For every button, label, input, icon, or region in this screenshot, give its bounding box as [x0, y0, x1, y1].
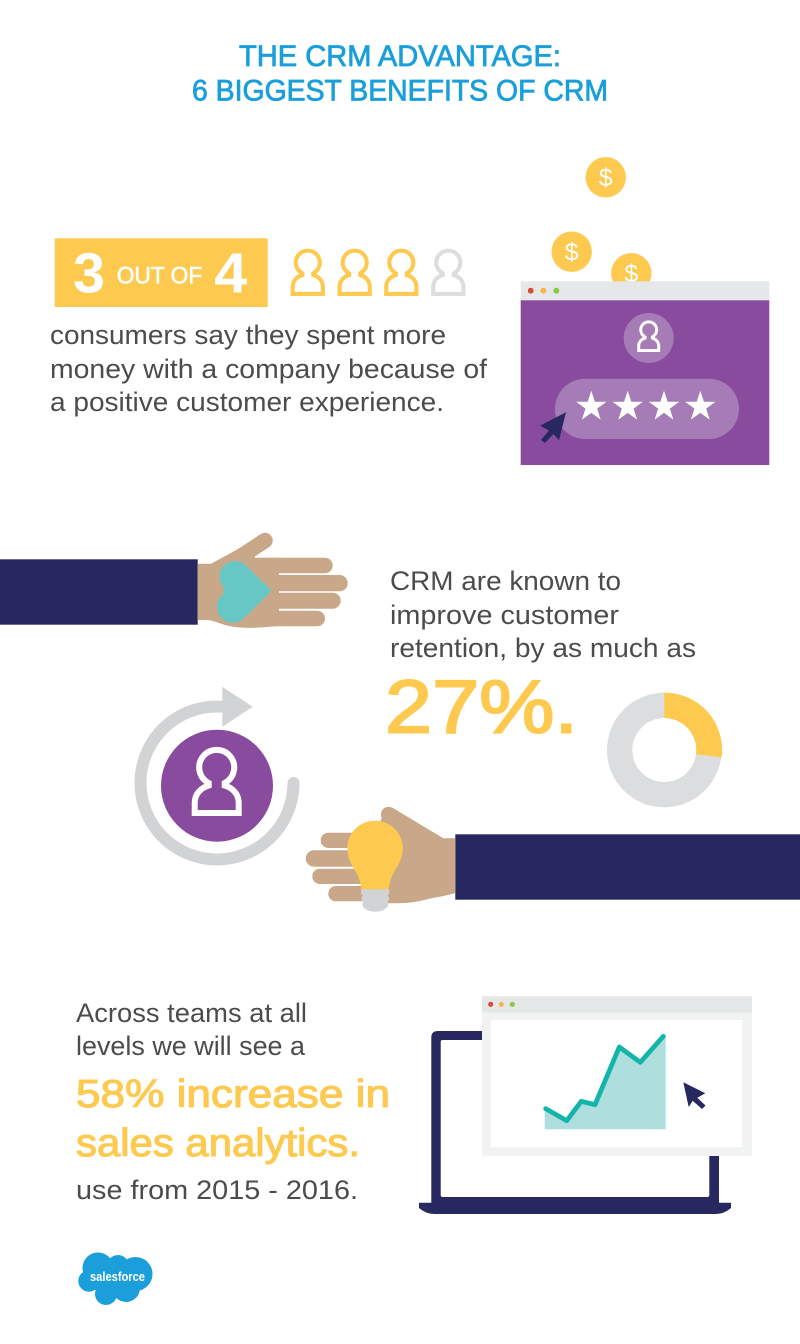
logo: salesforce cloud [78, 1252, 152, 1305]
title [192, 40, 608, 108]
title: 6 BIGGEST BENEFITS OF CRM [192, 75, 608, 108]
icon: heart [217, 561, 271, 623]
text: customer retention [385, 566, 696, 748]
chart: 27% donut [607, 693, 722, 807]
text: sales analytics: use from 2015 - 2016. [76, 1175, 358, 1205]
illustration: hand holding heart [0, 540, 348, 628]
text: sales analytics: levels we will see a [76, 1031, 306, 1061]
illustration: laptop [419, 1031, 731, 1214]
panel: browser window with star rating [521, 281, 769, 465]
text: customer retention: CRM are known to [390, 566, 621, 596]
illustration: hand holding lightbulb [306, 807, 800, 912]
title: THE CRM ADVANTAGE: [239, 40, 561, 73]
rating pill: four stars [555, 379, 739, 439]
icon: falling dollar coins: $ [565, 238, 579, 266]
text: consumers statement [50, 320, 488, 417]
panel: browser window with line chart [482, 996, 752, 1156]
icon: falling dollar coins: $ [624, 260, 638, 288]
stat: 58% increase: 58% increase in [76, 1073, 390, 1116]
icon: falling dollar coins: $ [599, 164, 613, 192]
badge: 3 out of 4: 4 [214, 242, 248, 306]
text: sales analytics: Across teams at all [76, 998, 307, 1028]
text: customer retention: improve customer [390, 600, 619, 630]
stat: 58% increase [76, 1073, 390, 1165]
icon: user avatar [624, 313, 674, 363]
icon: cursor [683, 1082, 706, 1109]
stat: 58% increase: sales analytics. [76, 1122, 360, 1165]
badge: 3 out of 4: OUT OF [117, 262, 202, 289]
logo: salesforce cloud: salesforce [90, 1269, 145, 1284]
icons: four people, three highlighted [293, 251, 463, 294]
text: customer retention: retention, by as much as [390, 633, 696, 663]
text: consumers statement: money with a company because of [50, 354, 488, 384]
text: sales analytics [76, 998, 390, 1205]
badge: 3 out of 4 [55, 238, 268, 307]
icon: lightbulb [347, 821, 403, 912]
panel: 3 out of 4 consumers [50, 238, 488, 417]
icon: cursor [540, 412, 566, 443]
badge: 3 out of 4: 3 [73, 242, 105, 306]
text: consumers statement: consumers say they spent more [50, 320, 446, 350]
stat: 27%: 27%. [385, 664, 578, 748]
icon: falling dollar coins [552, 157, 652, 294]
icon: circular arrow around user [140, 687, 294, 859]
text: consumers statement: a positive customer experience. [50, 387, 444, 417]
chart: rising area line [545, 1036, 666, 1129]
